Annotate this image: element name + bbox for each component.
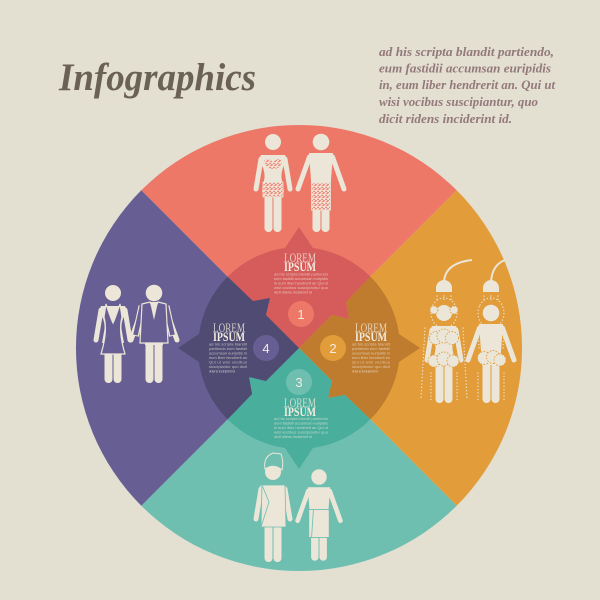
text block: orange: Qui ut wisi vocibus <box>352 360 390 364</box>
woman in bikini <box>256 134 290 232</box>
shower and man <box>468 260 514 403</box>
outer sector: blue <box>76 190 299 506</box>
text block: orange: partiendo eum fastidii <box>352 346 390 351</box>
text block: blue: eum liber hendrerit an <box>209 355 247 360</box>
text block: teal <box>274 395 329 439</box>
text block: blue: Qui ut wisi vocibus <box>209 360 247 364</box>
text block: teal: ad his scripta blandit partiendo <box>274 416 329 421</box>
text block: red <box>274 250 329 294</box>
outer sector: red <box>141 125 457 348</box>
text block: red: LOREM <box>284 250 316 265</box>
icon: shower couple <box>421 260 514 403</box>
intro paragraph: wisi vocibus suscipiantur, quo <box>379 95 538 109</box>
text block: orange: eum liber hendrerit an <box>352 355 390 360</box>
number badge 4 <box>253 335 279 361</box>
text block: red: in eum liber hendrerit an Qui ut <box>274 280 329 286</box>
icon: towel couple <box>256 453 340 562</box>
intro paragraph <box>379 45 555 126</box>
text block: orange <box>352 320 391 374</box>
icon: swimwear couple <box>256 134 344 232</box>
man in swim shorts <box>298 134 344 232</box>
title: Infographics <box>58 56 256 99</box>
text block: blue <box>209 320 248 374</box>
intro paragraph: in, eum liber hendrerit an. Qui ut <box>379 78 555 92</box>
text block: blue: accumsan euripidis in <box>209 350 247 356</box>
shower and woman <box>421 260 472 403</box>
text block: teal: LOREM <box>284 395 316 410</box>
man in towel <box>298 469 340 561</box>
number badge 3 <box>286 369 312 395</box>
text block: teal: eum fastidii accumsan euripidis <box>274 420 328 426</box>
inner arrow: red <box>228 227 370 348</box>
text block: orange: suscipiantur quo dicit <box>352 364 391 369</box>
number badge 3: 3 <box>295 375 303 390</box>
inner arrow: orange <box>299 277 420 419</box>
text block: blue: suscipiantur quo dicit <box>209 364 248 369</box>
woman in towel <box>256 453 290 562</box>
text block: orange: LOREM <box>355 320 387 335</box>
number badge 1 <box>288 301 314 327</box>
text block: teal: IPSUM <box>284 404 316 419</box>
icon: formal couple <box>96 285 177 383</box>
number badge 4: 4 <box>262 341 270 356</box>
man in suit <box>131 285 177 383</box>
text block: red: wisi vocibus suscipiantur quo <box>274 285 329 290</box>
number badge 1: 1 <box>297 307 305 322</box>
text block: blue: ridens inciderint id <box>209 368 235 374</box>
inner arrow: teal <box>228 348 370 469</box>
intro paragraph: ad his scripta blandit partiendo, <box>379 45 554 59</box>
text block: teal: in eum liber hendrerit an Qui ut <box>274 425 329 430</box>
text block: blue: LOREM <box>213 320 245 335</box>
intro paragraph: eum fastidii accumsan euripidis <box>379 62 551 76</box>
outer sector: teal <box>141 348 457 571</box>
text block: orange: IPSUM <box>355 329 387 344</box>
text block: red: ad his scripta blandit partiendo <box>274 272 329 276</box>
text block: orange: ridens inciderint id <box>352 368 378 374</box>
text block: teal: dicit ridens inciderint id <box>274 434 312 439</box>
text block: blue: IPSUM <box>213 329 245 344</box>
text block: orange: accumsan euripidis in <box>352 350 390 356</box>
number badge 2 <box>320 335 346 361</box>
text block: blue: partiendo eum fastidii <box>209 346 247 351</box>
outer sector: orange <box>299 190 522 506</box>
pie chart <box>76 125 522 571</box>
text block: red: eum fastidii accumsan euripidis <box>274 276 328 281</box>
text block: blue: ad his scripta blandit <box>209 342 248 346</box>
number badge 2: 2 <box>329 341 337 356</box>
text block: red: dicit ridens inciderint id <box>274 290 312 294</box>
woman in dress <box>96 285 130 383</box>
intro paragraph: dicit ridens inciderint id. <box>379 112 512 126</box>
text block: teal: wisi vocibus suscipiantur quo <box>274 430 329 434</box>
inner arrow: blue <box>178 277 299 419</box>
text block: orange: ad his scripta blandit <box>352 342 391 346</box>
inner arrow wheel <box>178 227 420 469</box>
text block: red: IPSUM <box>284 259 316 274</box>
